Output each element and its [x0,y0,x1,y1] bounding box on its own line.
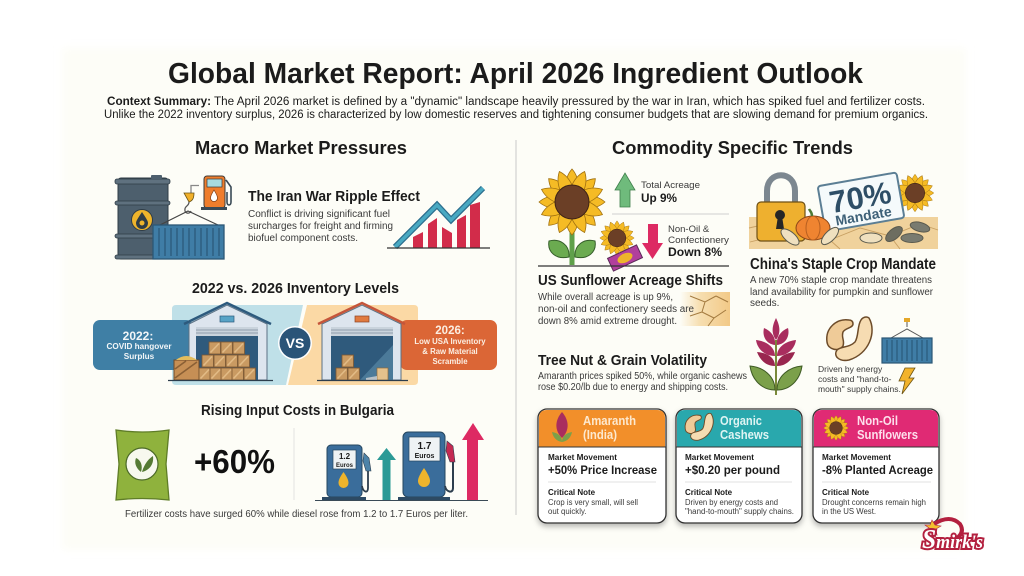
icon: fuel pump 1.2 euros: Euros [336,463,354,469]
critical note [548,488,638,516]
panel: US sunflower acreage [538,169,730,327]
label: 2022: 2022: [123,329,153,343]
panel: China's staple crop mandate [749,172,938,309]
icon: shipping container [153,211,224,259]
text: sunflower body: non-oil and confectionery seeds are [538,304,694,315]
text: driven by energy: costs and "hand-to- [818,374,892,384]
market movement: Market Movement [822,453,891,462]
icon: sunflower [539,169,605,265]
heading: tree nut: Tree Nut & Grain Volatility [538,352,708,369]
text: driven by energy: Driven by energy [818,364,883,374]
context summary: Unlike the 2022 inventory surplus, 2026 is characterized by low domestic reserves and tightening consumer budgets that are slowing demand for premium organics. [104,109,928,121]
icon: fuel pump 1.2 euros: 1.2 [339,452,351,461]
market movement: Market Movement [685,453,754,462]
arrow: green up [615,173,635,207]
page background panel [62,48,966,550]
text: non-oil down: Non-Oil & [668,224,710,235]
icon: cracked soil [680,292,730,326]
sign: 70% mandate: Mandate [834,203,893,229]
heading: iran war: The Iran War Ripple Effect [248,188,420,205]
icon: cashew [827,317,872,360]
market movement [822,453,933,477]
card header: Organic [720,414,762,428]
critical note: "hand-to-mouth" supply chains. [685,507,794,516]
title: Global Market Report: April 2026 Ingredient Outlook [168,58,864,90]
icon: amaranth plant [750,318,802,395]
heading: inventory levels: 2022 vs. 2026 Inventory Levels [192,281,399,297]
icon: fuel pump 1.7 euros: Euros [415,453,435,460]
icon: seeds [778,220,931,248]
panel: inventory comparison [93,303,497,385]
text: non-oil down: Down 8% [668,245,722,259]
text: sunflower body: down 8% amid extreme drought. [538,316,677,327]
card header: Cashews [720,428,769,442]
heading: rising input costs: Rising Input Costs in Bulgaria [201,403,395,419]
card header: (India) [583,428,617,442]
icon: pumps and arrows [315,423,488,500]
card: organic cashews [676,409,802,523]
arrow: red down [642,224,663,259]
market movement: Market Movement [548,453,617,462]
icon: pumpkin [796,209,830,240]
critical note: Critical Note [822,488,870,497]
critical note: Critical Note [685,488,733,497]
text: china body: land availability for pumpkin and sunflower [750,287,934,298]
label: 2026: Scramble [432,357,468,366]
icon: fertilizer bag [116,430,169,500]
card header [813,410,939,447]
label: 2026: & Raw Material [422,347,478,356]
text: iran war body: Conflict is driving significant fuel [248,209,390,220]
warehouse: 2022 full [168,303,273,380]
stat: +60%: +60% [194,443,275,480]
icon: sunflower [896,174,934,212]
heading: sunflower: US Sunflower Acreage Shifts [538,272,723,289]
label: 2022: Surplus [124,352,155,361]
heading: macro market pressures: Macro Market Pressures [195,138,407,158]
text: iran war body: biofuel component costs. [248,233,358,244]
card: non-oil sunflowers [813,409,939,523]
text: china body [750,275,934,309]
critical note: Crop is very small, will sell [548,498,638,507]
critical note: out quickly. [548,507,586,516]
text: iran war body: surcharges for freight and firming [248,221,393,232]
icon: fuel pump [201,176,231,210]
icon: fuel pump 1.7 euros [398,432,455,500]
card header: Amaranth [583,414,636,428]
critical note: in the US West. [822,507,876,516]
badge: VS: VS [286,335,304,351]
market movement [548,453,657,477]
market movement [685,453,780,477]
text: iran war body [248,209,393,244]
card header: Non-Oil [857,414,898,428]
market movement: +$0.20 per pound [685,463,780,477]
text: total acreage: Up 9% [641,191,677,205]
sign: 70% mandate: 70% [827,175,894,220]
text: non-oil down: Confectionery [668,235,729,246]
icon: fuel pump 1.7 euros: 1.7 [418,441,432,452]
icon: lightning [899,368,915,394]
critical note [685,488,794,516]
critical note: Critical Note [548,488,596,497]
text: china body: A new 70% staple crop mandate threatens [750,275,932,286]
card header [538,410,666,447]
text: non-oil down [668,224,729,259]
panel: tree nut and grain volatility [538,317,932,395]
text: total acreage: Total Acreage [641,180,700,191]
caption: input costs: Fertilizer costs have surged 60% while diesel rose from 1.2 to 1.7 Euros per liter. [125,509,468,520]
card header: Sunflowers [857,428,918,442]
logo: Smirk's: Smirk's [922,524,983,554]
label: 2022: COVID hangover [106,342,172,351]
icon: crane hook [184,186,199,213]
illustration: soil band [749,217,938,249]
market movement: -8% Planted Acreage [822,463,933,477]
text: driven by energy: mouth" supply chains. [818,384,901,394]
arrow: red up [462,423,484,500]
label: 2026: Low USA Inventory [414,337,486,346]
icon: hook and container [882,318,932,363]
heading: commodity specific trends: Commodity Specific Trends [612,138,853,158]
card header [676,410,802,447]
heading: china: China's Staple Crop Mandate [750,256,936,273]
warehouse: 2026 low [317,303,408,380]
text: tree nut body: Amaranth prices spiked 50%, while organic cashews [538,371,747,382]
critical note: Drought concerns remain high [822,498,926,507]
icon: padlock [757,175,805,241]
sign: 70% mandate [818,172,904,232]
critical note: Driven by energy costs and [685,498,778,507]
icon: small sunflower and candy [600,221,642,271]
badge: VS [278,326,312,360]
text: sunflower body: While overall acreage is up 9%, [538,292,673,303]
label: 2026: 2026: [435,325,465,337]
text: total acreage [641,180,700,205]
label: 2026 [400,320,497,370]
text: driven by energy [818,364,901,394]
context summary [104,96,928,121]
text: sunflower body [538,292,694,327]
icon: fuel pump 1.2 euros [322,445,371,500]
icon: oil barrel [115,175,170,259]
text: china body: seeds. [750,298,779,309]
panel: iran war ripple effect [115,175,490,259]
arrow: teal up [377,448,396,500]
context summary: Context Summary: The April 2026 market is defined by a "dynamic" landscape heavily pressured by the war in Iran, which has spiked fuel and fertilizer costs. [107,96,925,108]
card: amaranth [538,409,666,523]
chart: rising bars and trend line [387,188,490,248]
critical note [822,488,926,516]
text: tree nut body: rose $0.20/lb due to energy and shipping costs. [538,382,728,393]
label: 2022 [93,320,193,370]
text: tree nut body [538,371,747,393]
market movement: +50% Price Increase [548,463,657,477]
